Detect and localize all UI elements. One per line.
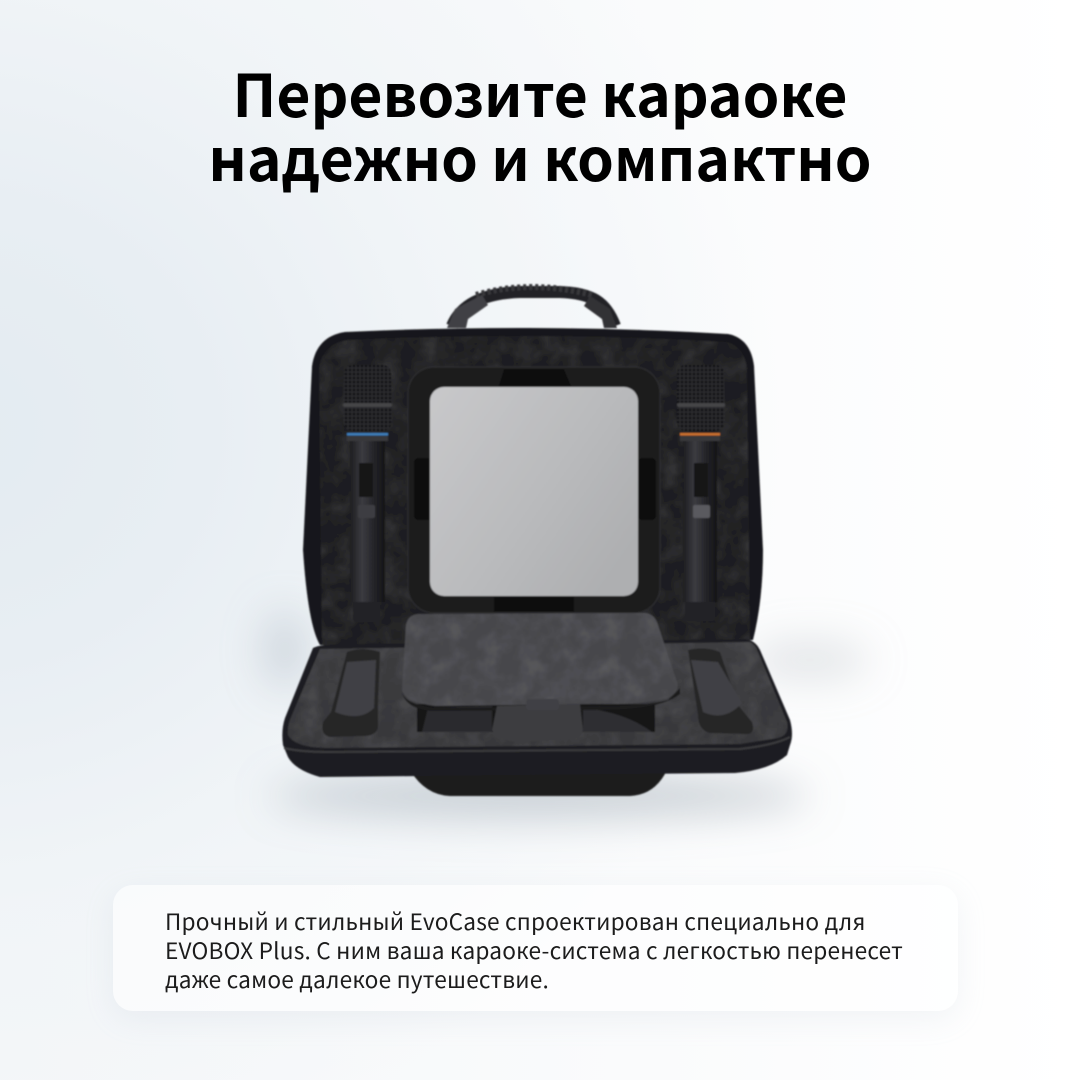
inner frame around plate bbox=[408, 367, 660, 613]
flap edge shadow bbox=[402, 688, 680, 711]
title bbox=[208, 49, 872, 198]
title: Перевозите караоке bbox=[232, 49, 848, 134]
frame dark notches bbox=[414, 369, 656, 612]
description text: даже самое далекое путешествие. bbox=[165, 962, 549, 995]
title: надежно и компактно bbox=[208, 113, 872, 198]
description panel bbox=[113, 885, 958, 1011]
upper shell bbox=[303, 328, 763, 645]
description text: Прочный и стильный EvoCase спроектирован специально для bbox=[165, 904, 866, 937]
felt flap bbox=[402, 613, 678, 706]
upper shell felt lining bbox=[319, 336, 750, 645]
storage pocket bbox=[417, 704, 655, 732]
case lower bump bbox=[410, 770, 667, 796]
rim highlight bbox=[284, 737, 790, 752]
left mic slot bbox=[322, 649, 380, 737]
description text bbox=[165, 904, 903, 995]
folded cloth right bbox=[583, 708, 652, 732]
right microphone bbox=[677, 365, 725, 621]
silver plate bbox=[430, 387, 638, 596]
left microphone bbox=[343, 365, 392, 622]
folded cloth in pocket bbox=[422, 706, 492, 732]
soft shadow under case bbox=[263, 610, 870, 818]
right mic slot bbox=[688, 648, 753, 734]
small pouch bbox=[492, 704, 583, 742]
case artwork bbox=[282, 287, 792, 796]
lower tray outer shell bbox=[282, 639, 792, 777]
description text: EVOBOX Plus. С ним ваша караоке-система с легкостью перенесет bbox=[165, 933, 903, 966]
handle bbox=[447, 287, 617, 328]
pouch tab bbox=[526, 699, 559, 710]
lower tray felt bbox=[288, 642, 788, 748]
